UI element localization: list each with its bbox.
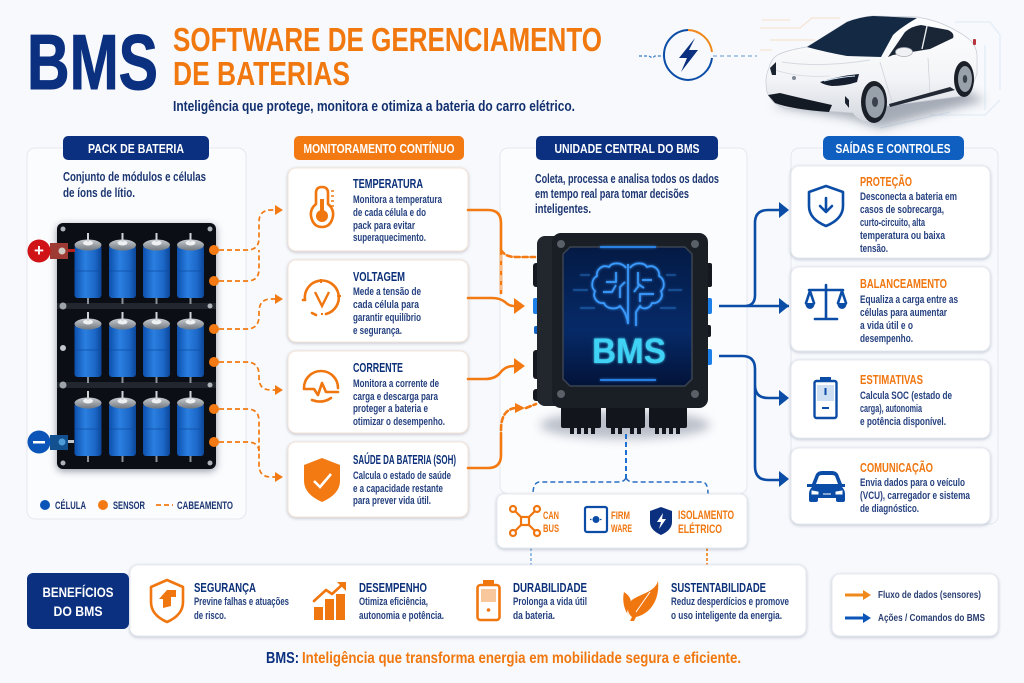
- card: proteção: temperatura ou baixa: [860, 230, 946, 242]
- text: isolamento elétrico: ISOLAMENTO: [678, 508, 734, 522]
- heading: unidade central: UNIDADE CENTRAL DO BMS: [554, 142, 700, 156]
- card: temperatura: de cada célula e do: [353, 207, 426, 219]
- heading: pack de bateria: PACK DE BATERIA: [88, 142, 184, 156]
- benefit: sustentabilidade: Reduz desperdícios e promove: [671, 596, 789, 608]
- title: software de gerenciamento de baterias: SOFTWARE DE GERENCIAMENTO: [173, 21, 602, 58]
- arrows: monitoring cards to bms: [468, 210, 536, 468]
- text: isolamento elétrico: [678, 508, 734, 536]
- card: estimativas: Calcula SOC (estado de: [860, 390, 952, 402]
- legend: pack: CÉLULA: [55, 499, 86, 512]
- card: comunicação: de diagnóstico.: [860, 503, 919, 515]
- benefit: durabilidade: Prolonga a vida útil: [513, 596, 587, 608]
- benefit: durabilidade: [478, 580, 587, 622]
- card: corrente: CORRENTE: [353, 361, 403, 375]
- text: pack description: Conjunto de módulos e células: [63, 169, 206, 184]
- panel: saídas e controles: [791, 136, 998, 524]
- card: estimativas: ESTIMATIVAS: [860, 373, 923, 387]
- heading: benefícios: BENEFÍCIOS: [42, 585, 114, 600]
- title: software de gerenciamento de baterias: [173, 21, 602, 92]
- icon: isolation shield: [650, 507, 672, 535]
- card: corrente: proteger a bateria e: [353, 403, 428, 415]
- card: proteção: tensão.: [860, 243, 888, 255]
- card: interfaces: [497, 494, 747, 548]
- card: voltagem: [288, 260, 468, 342]
- benefit: durabilidade: DURABILIDADE: [513, 581, 587, 595]
- icon: leaf: [623, 581, 658, 621]
- footer tagline: Inteligência que transforma energia em mobilidade segura e eficiente.: [302, 650, 741, 667]
- card: voltagem: e segurança.: [353, 325, 402, 337]
- card: proteção: curto-circuito, alta: [860, 217, 926, 229]
- icon: CAN bus: [510, 506, 540, 536]
- benefit: segurança: de risco.: [194, 610, 226, 622]
- side connectors: [533, 263, 712, 401]
- icon: current pulse: [304, 371, 338, 402]
- card: saúde da bateria: Calcula o estado de saúde: [353, 470, 451, 482]
- title: software de gerenciamento de baterias: DE BATERIAS: [173, 55, 350, 92]
- text: pack description: [63, 169, 206, 200]
- sensors: [209, 245, 219, 447]
- subtitle: Inteligência que protege, monitora e otimiza a bateria do carro elétrico.: [173, 98, 575, 115]
- heading: pack de bateria: [63, 136, 209, 160]
- icon: lightning circle: [639, 30, 757, 80]
- icon: shield: [151, 580, 183, 622]
- text: central unit description: em tempo real para tomar decisões: [535, 186, 689, 201]
- card: proteção: [791, 166, 990, 258]
- card: balanceamento: desempenho.: [860, 333, 913, 345]
- icon: battery: [478, 580, 500, 620]
- card: comunicação: COMUNICAÇÃO: [860, 460, 933, 475]
- card: comunicação: [791, 448, 990, 524]
- card: balanceamento: a vida útil e o: [860, 320, 913, 332]
- dashed links: bms to interfaces: [531, 434, 708, 566]
- benefit: durabilidade: da bateria.: [513, 610, 555, 622]
- card: voltagem: cada célula para: [353, 299, 420, 311]
- text: central unit description: inteligentes.: [535, 201, 591, 216]
- icon: shield arrow: [809, 186, 843, 226]
- legend: pack: CABEAMENTO: [177, 500, 233, 512]
- icon: growth chart: [314, 582, 346, 620]
- text: CAN bus: CAN: [543, 510, 559, 522]
- negative terminal: [28, 430, 74, 454]
- benefit: sustentabilidade: o uso inteligente da energia.: [671, 610, 782, 622]
- card: temperatura: TEMPERATURA: [353, 177, 423, 191]
- battery pack: [57, 223, 216, 469]
- card: proteção: casos de sobrecarga,: [860, 204, 944, 216]
- card: estimativas: [791, 360, 990, 438]
- icon: shield check: [304, 458, 340, 502]
- benefit: desempenho: Otimiza eficiência,: [359, 596, 428, 608]
- benefit: desempenho: DESEMPENHO: [359, 581, 427, 595]
- card: corrente: Monitora a corrente de: [353, 378, 439, 390]
- card: voltagem: garantir equilíbrio: [353, 312, 421, 324]
- icon: battery estimate: [814, 377, 836, 418]
- card: temperatura: pack para evitar: [353, 220, 416, 232]
- bms control unit: [533, 233, 712, 439]
- card: corrente: carga e descarga para: [353, 391, 439, 403]
- card: saúde da bateria: SAÚDE DA BATERIA (SOH): [353, 452, 456, 467]
- card: saúde da bateria: [288, 442, 468, 517]
- panel: pack de bateria: [27, 136, 246, 519]
- icon: car: [807, 471, 845, 502]
- legend: arrows: Fluxo de dados (sensores): [878, 589, 981, 601]
- heading: unidade central: [536, 136, 718, 160]
- card: saúde da bateria: e a capacidade restante: [353, 483, 443, 495]
- legend: pack: SENSOR: [113, 500, 145, 512]
- card: balanceamento: Equaliza a carga entre as: [860, 294, 958, 306]
- card: voltagem: Mede a tensão de: [353, 286, 421, 298]
- text: firmware: WARE: [611, 523, 632, 535]
- card: temperatura: superaquecimento.: [353, 232, 426, 244]
- benefit: segurança: [151, 580, 289, 622]
- icon: brain: [573, 263, 682, 326]
- card: estimativas: carga), autonomia: [860, 403, 923, 415]
- benefit: segurança: SEGURANÇA: [194, 581, 256, 595]
- card: comunicação: Envia dados para o veículo: [860, 477, 965, 489]
- text: pack description: de íons de lítio.: [63, 185, 135, 200]
- heading: benefícios: [27, 573, 129, 629]
- legend: pack: [40, 499, 233, 512]
- card: balanceamento: [791, 267, 990, 351]
- card: corrente: otimizar o desempenho.: [353, 416, 445, 428]
- icon: balance scale: [805, 285, 847, 319]
- panel: unidade central do bms: [500, 136, 747, 494]
- benefit: desempenho: autonomia e potência.: [359, 610, 444, 622]
- shadow: [540, 411, 710, 439]
- positive terminal: +: [34, 241, 44, 260]
- heading: saídas e controles: [823, 136, 964, 160]
- legend: arrows: Ações / Comandos do BMS: [878, 612, 985, 624]
- benefit: sustentabilidade: SUSTENTABILIDADE: [671, 581, 766, 595]
- arrows: bms to output cards: [719, 202, 789, 487]
- decorative circuit lines: [760, 18, 1000, 128]
- text: firmware: FIRM: [611, 510, 630, 522]
- card: saúde da bateria: para prever vida útil.: [353, 495, 431, 507]
- icon: voltage gauge: [303, 279, 341, 315]
- car illustration: [766, 16, 985, 128]
- card: temperatura: [288, 168, 468, 251]
- card: voltagem: VOLTAGEM: [353, 270, 405, 284]
- heading: monitoramento contínuo: MONITORAMENTO CONTÍNUO: [304, 141, 455, 156]
- bottom connectors: [561, 400, 687, 434]
- panel: benefícios do bms: [27, 565, 806, 636]
- text: CAN bus: BUS: [543, 523, 559, 535]
- heading: benefícios: DO BMS: [54, 604, 102, 619]
- card: balanceamento: células para aumentar: [860, 307, 948, 319]
- card: proteção: Desconecta a bateria em: [860, 191, 957, 203]
- card: balanceamento: BALANCEAMENTO: [860, 277, 947, 291]
- benefit: desempenho: [314, 581, 444, 622]
- benefit: segurança: Previne falhas e atuações: [194, 596, 289, 608]
- benefit: sustentabilidade: [623, 581, 789, 622]
- icon: thermometer: [311, 187, 334, 227]
- text: central unit description: [535, 171, 719, 216]
- card: proteção: PROTEÇÃO: [860, 174, 912, 189]
- screen: [563, 247, 692, 386]
- heading: monitoramento contínuo: [294, 136, 464, 160]
- card: comunicação: (VCU), carregador e sistema: [860, 490, 971, 502]
- footer tagline: BMS:: [266, 650, 299, 667]
- arrows: sensor cabling to monitoring cards: [219, 205, 283, 482]
- label: BMS: BMS: [592, 332, 666, 371]
- title: BMS: BMS: [27, 18, 158, 106]
- heading: saídas e controles: SAÍDAS E CONTROLES: [836, 141, 950, 156]
- positive terminal: [28, 240, 75, 262]
- text: central unit description: Coleta, processa e analisa todos os dados: [535, 171, 719, 186]
- card: corrente: [288, 351, 468, 433]
- icon: firmware: [585, 507, 607, 532]
- card: estimativas: e potência disponível.: [860, 416, 946, 428]
- legend: arrows: [832, 574, 998, 636]
- text: firmware: [611, 510, 632, 535]
- text: isolamento elétrico: ELÉTRICO: [678, 521, 722, 536]
- text: CAN bus: [543, 510, 559, 535]
- card: temperatura: Monitora a temperatura: [353, 194, 443, 206]
